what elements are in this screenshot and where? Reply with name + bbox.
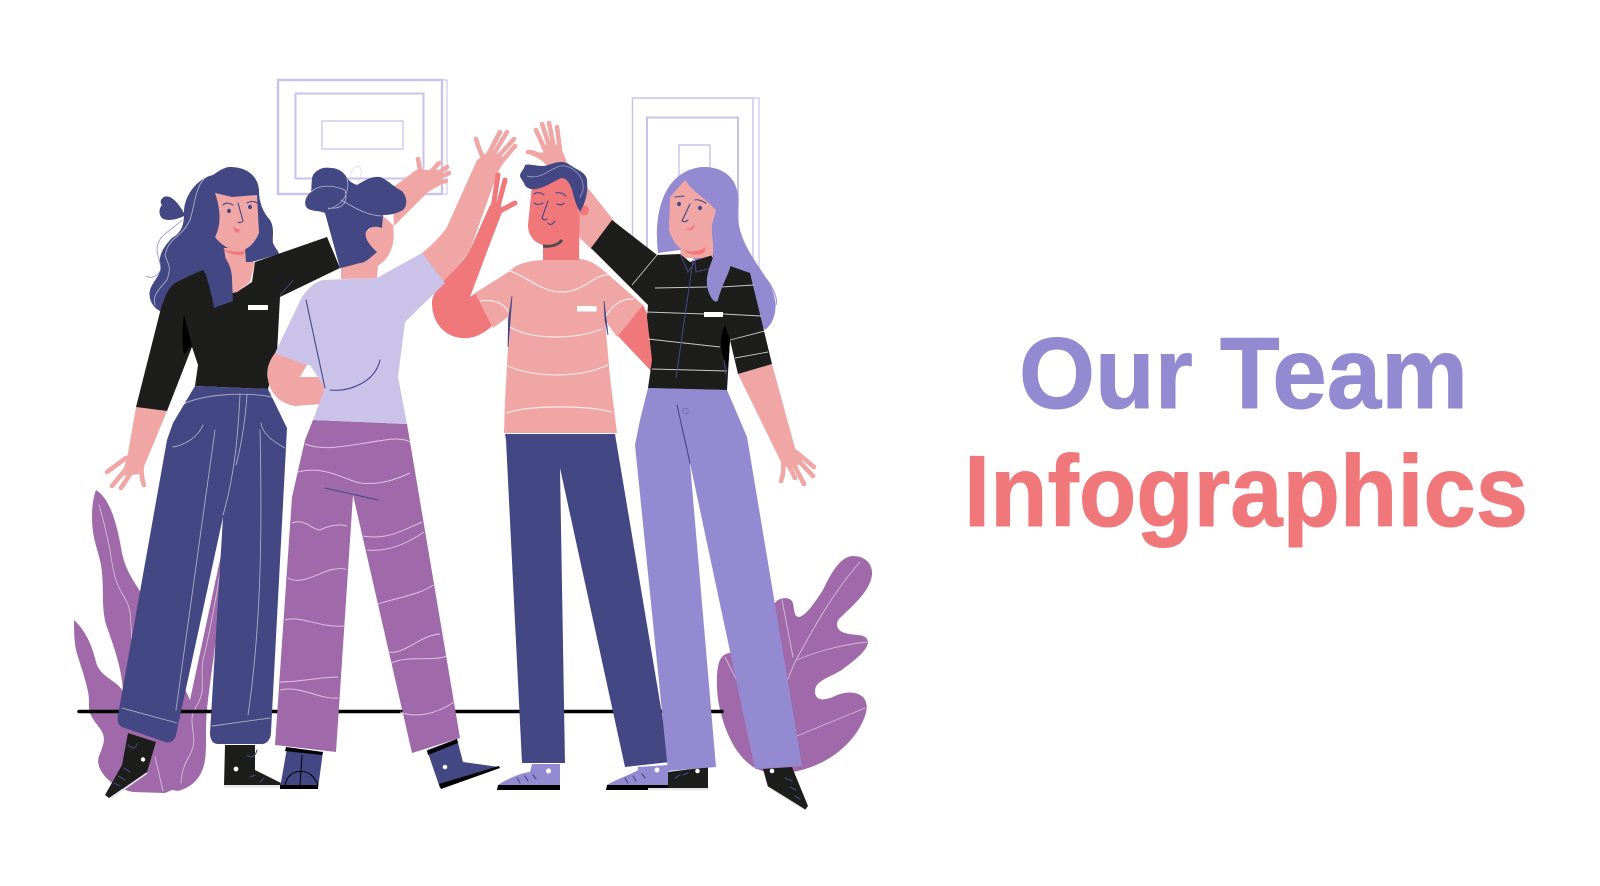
title: Infographics: Infographics [964,436,1528,548]
back lower arm [617,305,660,372]
face features [534,193,566,196]
figure: back woman with bun [267,166,500,789]
right black shoe [763,767,808,810]
lower arm and hand [122,407,167,476]
purple trousers [275,420,460,753]
blue jeans [118,386,287,744]
left shoe [498,764,560,785]
head [528,170,580,260]
blue trousers [505,434,670,767]
background wall frames [278,80,759,280]
title: Our Team: Our Team [1019,318,1468,430]
hair back [657,167,775,330]
name tag [577,306,596,312]
raised right arm [422,150,506,285]
pink striped t-shirt [475,259,643,433]
front hair [685,167,738,302]
arm behind back [267,353,326,406]
name tag [704,312,723,317]
lavender trousers [635,388,802,771]
hair [520,162,587,212]
black shirt [136,237,340,411]
coral fingers [492,175,515,218]
name tag [248,305,268,310]
left shoe [280,748,323,788]
beard [543,240,562,246]
raised hand [528,145,568,175]
figure: left woman hair back and bun [146,167,279,312]
floor line [79,710,722,713]
ear [578,205,590,216]
neck [680,240,713,258]
plant: right leaf [717,556,872,773]
face [215,193,259,250]
hair bun outline [311,166,382,216]
figure: woman with lavender hair, front layer [591,167,814,810]
figure: left woman body [105,193,340,799]
figure: back woman raised arms [392,132,515,338]
face features [223,202,257,233]
face [669,180,716,258]
hair [305,168,406,268]
lilac t-shirt [275,253,445,424]
face features [675,196,706,230]
figure: man [475,162,670,790]
ear [364,230,378,242]
black shirt [591,220,772,390]
hair bun [159,196,184,220]
left boot [105,733,156,798]
coral forearm [432,205,503,338]
chest and neck [205,248,255,296]
plant: left leaves [74,490,221,793]
figure: woman with lavender hair, back layer [528,123,776,330]
front hair lock [205,250,233,308]
raised arm [566,163,615,250]
neck and head skin [341,215,394,279]
right boot [224,745,281,787]
left black shoe [668,767,708,789]
figure: man's right shoe [606,765,670,790]
right shoe [427,739,499,788]
lower arm and hand [738,364,803,470]
raised left arm [392,170,442,226]
long hair [150,167,279,312]
